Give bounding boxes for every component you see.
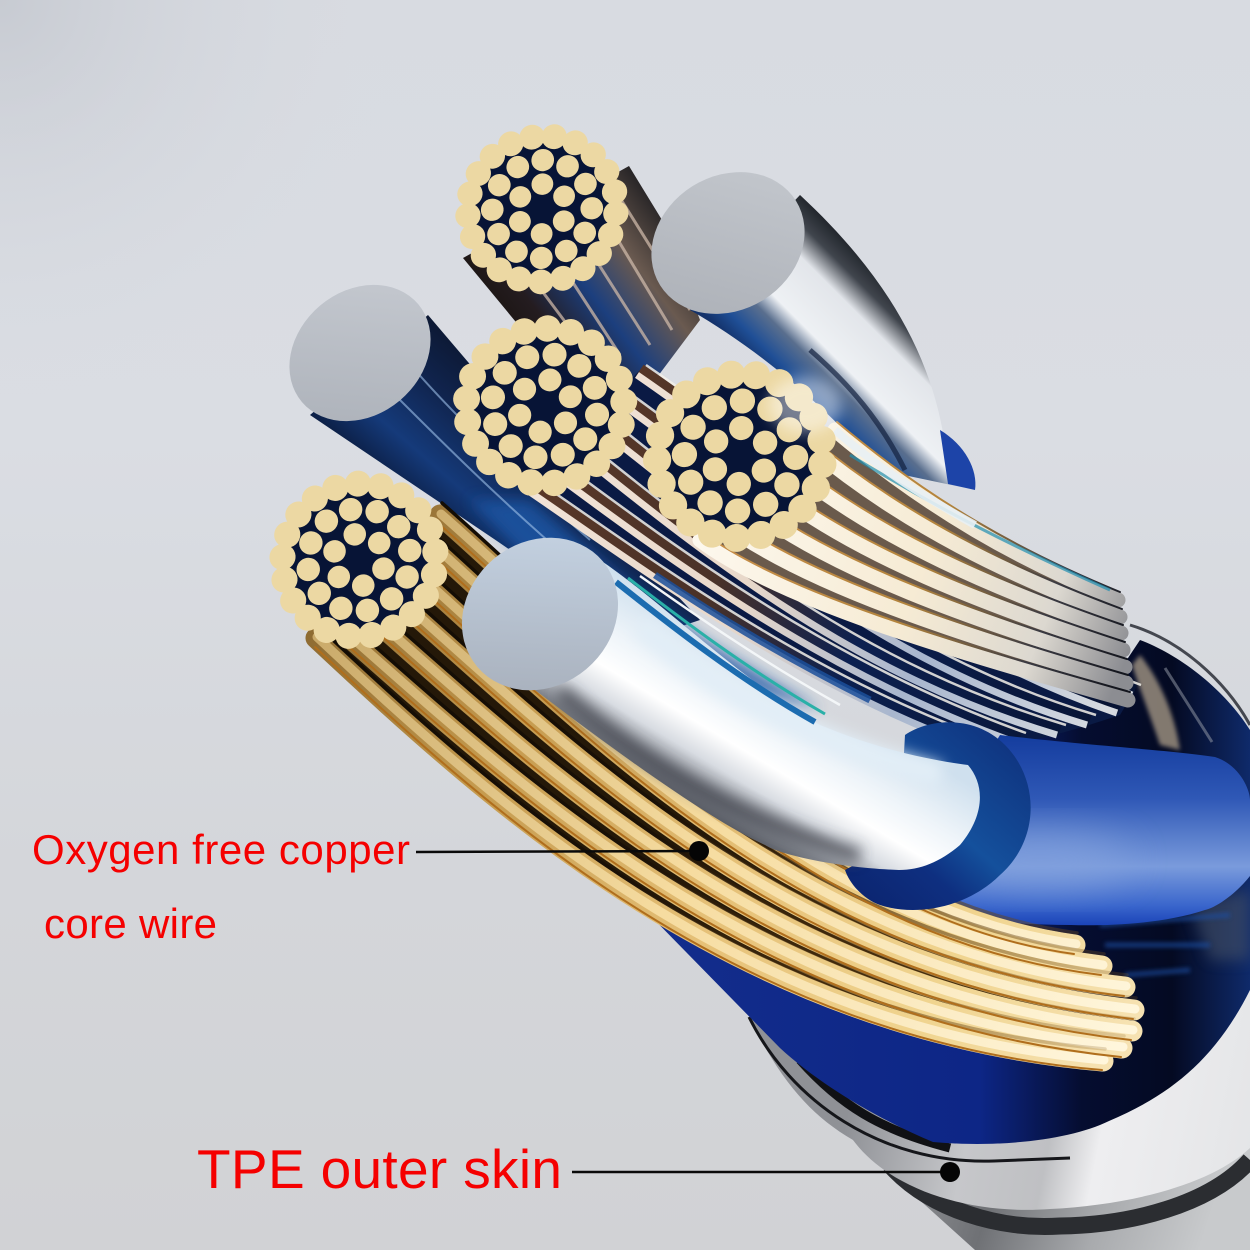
silver insulated core G <box>431 506 980 870</box>
leader line to outer skin <box>572 1162 960 1182</box>
blue jacket tube <box>920 735 1250 925</box>
copper bundle A end face <box>425 92 660 325</box>
copper bundle B end face <box>428 289 663 522</box>
label: TPE outer skin: TPE outer skin <box>197 1138 562 1200</box>
label: Oxygen free copper core wire: core wire <box>44 900 217 947</box>
TPE outer skin ring <box>749 900 1250 1210</box>
oxygen free copper core wire bundle <box>315 503 1136 1070</box>
inner blue mouth of cable <box>640 625 1250 1144</box>
copper bundle D end face <box>234 434 485 685</box>
silver core F: dark insulated wire, left <box>262 257 820 710</box>
cable outer sheath: tail <box>853 1100 1250 1250</box>
silver core E: insulated wire, upper right <box>625 144 975 490</box>
label: Oxygen free copper core wire <box>32 826 410 947</box>
copper bundle A wires <box>463 166 700 400</box>
leader line to copper core <box>416 841 709 861</box>
blue jacket ring <box>845 722 1031 910</box>
copper bundle C end face <box>610 326 871 585</box>
copper bundle B wires <box>527 365 1141 750</box>
copper bundle C wires <box>700 422 1130 700</box>
label: Oxygen free copper core wire: Oxygen free copper <box>32 826 410 873</box>
